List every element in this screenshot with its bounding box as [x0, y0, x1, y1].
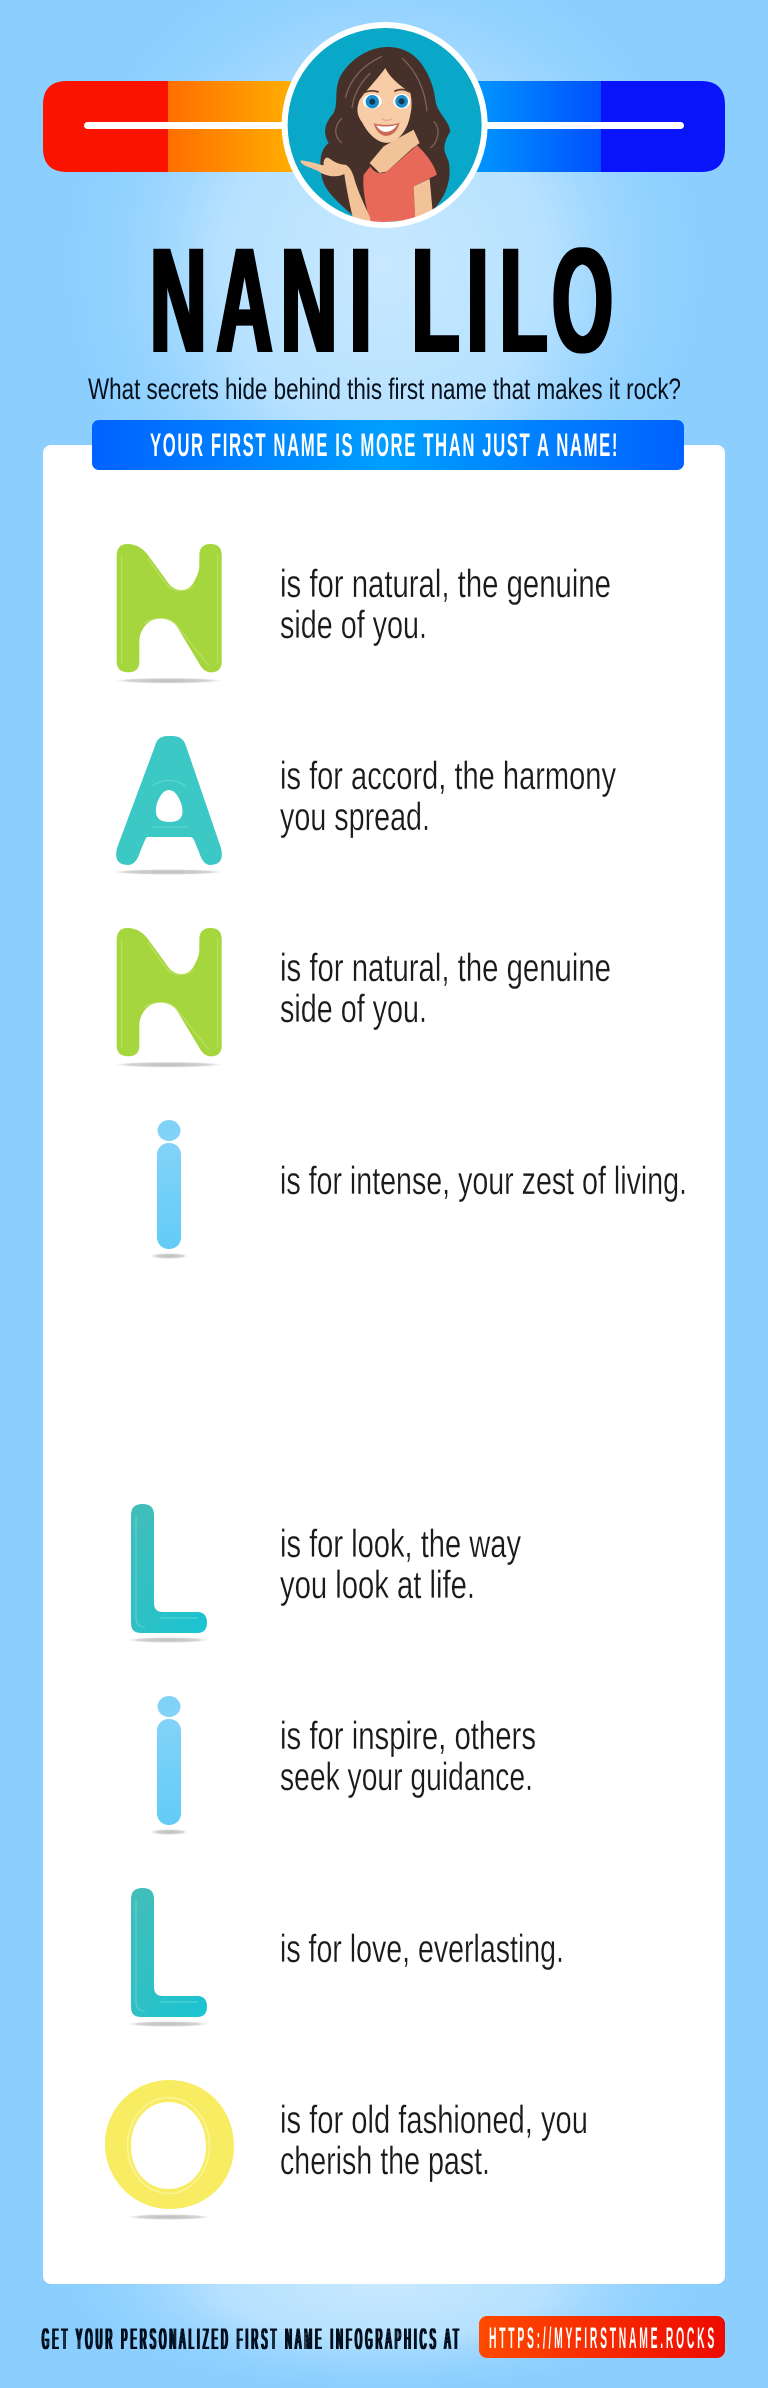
face — [357, 68, 412, 143]
eyes — [363, 94, 410, 109]
letter I — [149, 1696, 189, 1835]
row: L look — [124, 1504, 521, 1643]
left arm and hand — [300, 158, 370, 223]
text: cherish the past. — [280, 2140, 490, 2183]
text: is for natural, the genuine — [280, 563, 611, 606]
white panel — [43, 445, 725, 2284]
text: is for natural, the genuine — [280, 947, 611, 990]
header colour bar — [43, 81, 725, 172]
shirt — [363, 145, 437, 223]
letter O — [105, 2080, 234, 2220]
text — [280, 947, 611, 1031]
header glow — [49, 0, 719, 605]
right arm — [414, 179, 433, 220]
banner — [92, 420, 684, 470]
letter L — [124, 1888, 212, 2027]
row: I inspire — [149, 1696, 536, 1835]
nose — [382, 119, 392, 120]
avatar portrait — [285, 25, 485, 225]
footer glow — [54, 2174, 714, 2388]
text: is for love, everlasting. — [280, 1928, 564, 1971]
hair — [320, 47, 450, 218]
text — [280, 1715, 536, 1799]
row: L love — [124, 1888, 564, 2027]
neck and chest — [370, 130, 420, 173]
text: you spread. — [280, 796, 430, 839]
text: side of you. — [280, 604, 427, 647]
text — [280, 755, 616, 839]
eyebrows — [361, 90, 410, 95]
row: I intense — [149, 1120, 687, 1259]
letter L — [124, 1504, 212, 1643]
text — [280, 2099, 588, 2183]
row: O old fashioned — [105, 2080, 588, 2220]
letter N — [110, 928, 227, 1068]
text: is for inspire, others — [280, 1715, 536, 1758]
text — [280, 1523, 521, 1607]
row: A accord — [108, 736, 616, 875]
hair strands — [336, 56, 438, 148]
text: is for old fashioned, you — [280, 2099, 588, 2142]
letter A — [108, 736, 228, 875]
row: N natural — [110, 928, 611, 1068]
text: you look at life. — [280, 1564, 475, 1607]
footer link button — [479, 2316, 725, 2358]
title: NANI LILO — [150, 218, 613, 385]
row: N natural — [110, 544, 611, 684]
letter N — [110, 544, 227, 684]
text — [280, 563, 611, 647]
text: side of you. — [280, 988, 427, 1031]
letter I — [149, 1120, 189, 1259]
text: is for look, the way — [280, 1523, 521, 1566]
text: is for accord, the harmony — [280, 755, 616, 798]
mouth — [374, 123, 400, 136]
text: seek your guidance. — [280, 1756, 533, 1799]
